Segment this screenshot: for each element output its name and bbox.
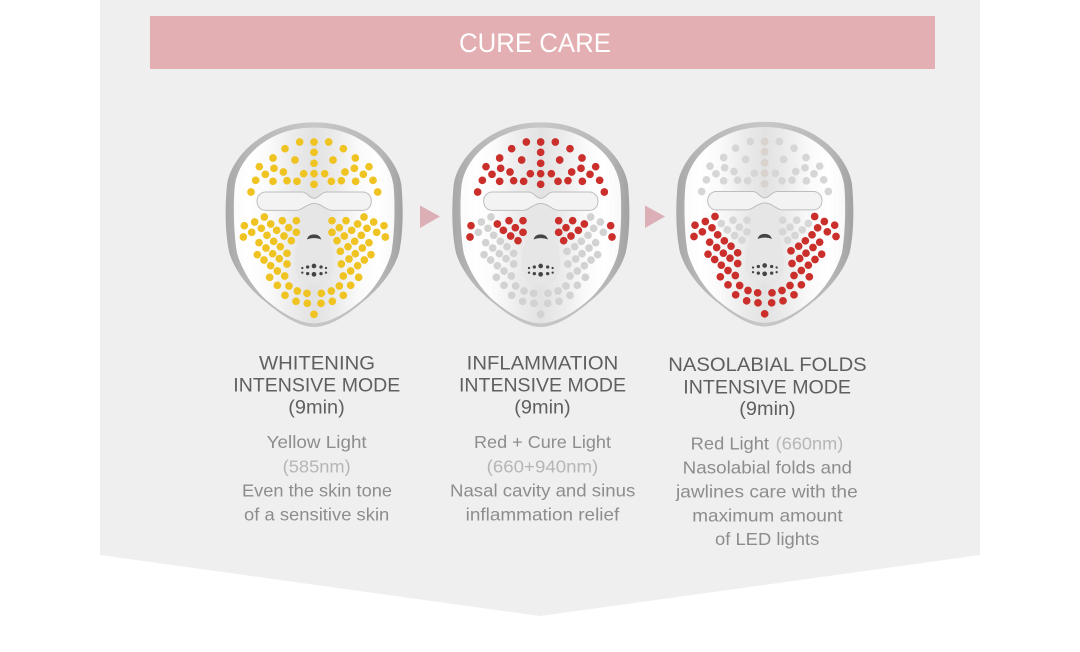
mask: inflammation red and grey xyxy=(452,122,629,327)
column 1 heading: INTENSIVE MODE xyxy=(233,376,400,397)
title banner: CURE CARE xyxy=(459,28,611,58)
column 2 description: inflammation relief xyxy=(466,504,619,524)
column 3 description xyxy=(675,433,858,549)
column 1 description: of a sensitive skin xyxy=(244,504,389,524)
column 3 heading: NASOLABIAL FOLDS xyxy=(668,355,867,376)
column 3 description: of LED lights xyxy=(715,529,820,549)
column 3 heading: (9min) xyxy=(739,399,796,420)
mask: whitening yellow xyxy=(226,122,403,327)
column 3 heading: INTENSIVE MODE xyxy=(683,377,851,398)
column 3 description: Nasolabial folds and xyxy=(683,457,852,477)
column 2 description: Nasal cavity and sinus xyxy=(450,480,636,500)
column 3 description: Red Light xyxy=(691,433,769,453)
column 1 description: (585nm) xyxy=(283,456,351,476)
arrow: first to second xyxy=(420,206,440,228)
column 1 heading xyxy=(233,354,400,418)
column 2 heading xyxy=(459,354,626,418)
column 2 description xyxy=(450,432,636,524)
column 3 heading xyxy=(668,355,867,420)
column 3 description: jawlines care with the xyxy=(675,481,858,501)
arrow: second to third xyxy=(645,206,665,228)
column 2 heading: INTENSIVE MODE xyxy=(459,376,626,397)
column 3 description: (660nm) xyxy=(776,433,843,453)
column 2 description: Red + Cure Light xyxy=(474,432,611,452)
column 2 description: (660+940nm) xyxy=(487,456,598,476)
column 3 description: maximum amount xyxy=(692,505,843,525)
column 1 description: Even the skin tone xyxy=(242,480,392,500)
mask: nasolabial red xyxy=(676,122,853,326)
column 1 description: Yellow Light xyxy=(267,432,367,452)
column 2 heading: INFLAMMATION xyxy=(467,354,618,374)
column 1 heading: (9min) xyxy=(288,398,345,418)
column 1 description xyxy=(242,432,392,524)
column 2 heading: (9min) xyxy=(514,398,571,418)
background panel xyxy=(100,0,980,616)
title banner xyxy=(150,16,935,69)
column 1 heading: WHITENING xyxy=(259,354,375,374)
